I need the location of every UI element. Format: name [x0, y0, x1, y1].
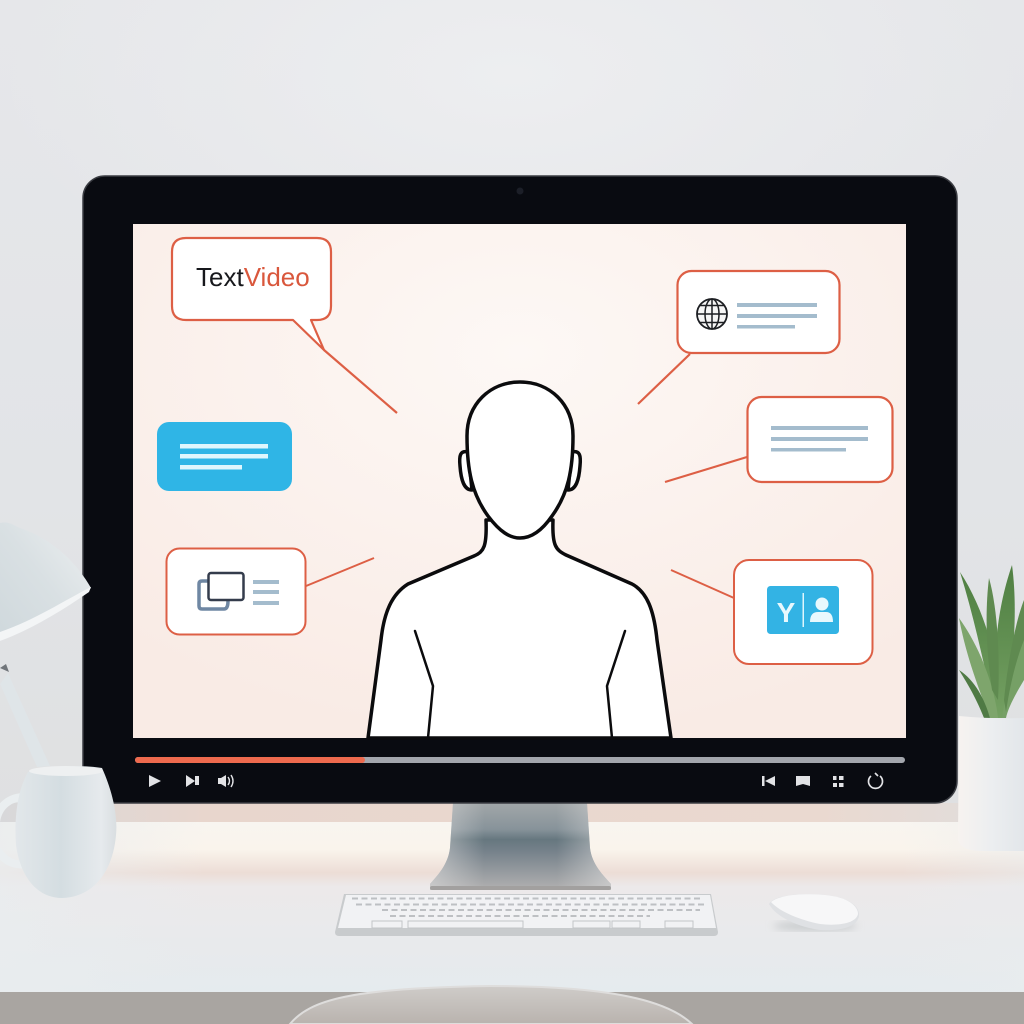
video controls — [135, 757, 905, 788]
icon: volume — [218, 775, 233, 787]
blue badge — [767, 586, 839, 634]
screen — [133, 224, 906, 738]
webcam — [516, 188, 524, 194]
left arm line — [415, 631, 433, 738]
icon: next — [186, 775, 199, 787]
icon: user — [810, 598, 833, 622]
callout: text lines — [665, 397, 892, 482]
connector line — [306, 558, 374, 586]
right arm line — [607, 631, 625, 738]
plant — [958, 565, 1024, 851]
icon: play — [149, 775, 161, 787]
icon: previous — [762, 776, 775, 786]
mug — [0, 766, 116, 898]
connector line — [671, 570, 734, 598]
chair back — [290, 986, 692, 1024]
icon: globe — [697, 299, 727, 329]
lamp arm — [0, 673, 50, 767]
keyboard — [335, 894, 718, 936]
mouse — [769, 894, 859, 931]
progress fill — [135, 757, 365, 763]
progress track — [135, 757, 905, 763]
callout: screens icon — [166, 548, 374, 634]
key rows — [352, 898, 704, 916]
left ear — [460, 452, 472, 490]
text lines — [737, 303, 817, 307]
connector line — [638, 354, 690, 404]
connector line — [324, 350, 397, 413]
body — [368, 520, 671, 738]
leaves — [959, 565, 1024, 718]
icon: bookmark screen — [796, 776, 810, 786]
callout: globe — [638, 271, 840, 404]
mug handle — [0, 797, 28, 864]
mug body — [16, 766, 116, 898]
icon: overlapping screens — [199, 573, 244, 609]
lamp — [0, 523, 91, 767]
icon: grid — [833, 776, 844, 787]
callout: blue text card — [157, 422, 292, 491]
space bar row — [372, 921, 693, 928]
person silhouette — [368, 382, 671, 738]
icon: replay — [868, 773, 883, 788]
text lines — [253, 580, 279, 584]
connector line — [665, 457, 747, 482]
callout: TextVideo — [172, 238, 397, 413]
monitor stand — [430, 803, 611, 890]
callout: Y profile card — [671, 560, 872, 664]
callout: Y profile card: Y — [777, 597, 796, 628]
lamp shade — [0, 523, 91, 641]
monitor bezel — [83, 176, 957, 803]
desk — [0, 822, 1024, 1024]
right ear — [568, 452, 580, 490]
monitor — [83, 176, 957, 803]
head — [467, 382, 573, 538]
label: TextVideo — [196, 262, 310, 292]
pot — [958, 716, 1024, 851]
